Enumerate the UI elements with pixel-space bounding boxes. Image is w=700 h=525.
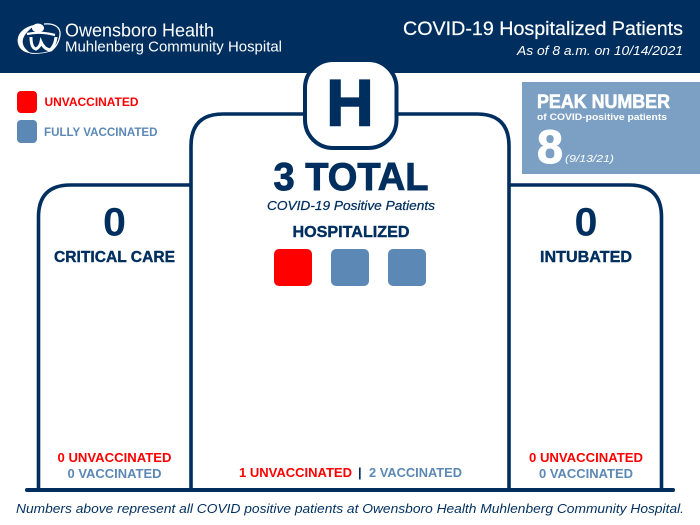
hospitalized breakdown [239, 465, 462, 480]
peak subheading: of COVID-positive patients [537, 112, 667, 123]
patient square: vaccinated 2 [388, 249, 426, 286]
patient square: unvaccinated [274, 249, 312, 286]
icon: hospital H badge: H [326, 65, 374, 139]
intubated count: 0 [574, 200, 598, 244]
panel: critical care [38, 185, 191, 490]
peak heading: PEAK NUMBER [537, 92, 670, 113]
title: COVID-19 Hospitalized Patients [403, 18, 683, 40]
logo subname: Muhlenberg Community Hospital [65, 38, 282, 56]
legend [17, 91, 158, 143]
peak number box [522, 82, 700, 174]
hospitalized vaccinated: 2 VACCINATED [369, 465, 462, 480]
logo name: Owensboro Health [65, 20, 214, 40]
baseline [27, 488, 673, 492]
legend label: unvaccinated: UNVACCINATED [44, 95, 139, 109]
breakdown separator: | [358, 465, 362, 480]
legend swatch: fully vaccinated [17, 120, 37, 143]
intubated heading: INTUBATED [540, 249, 632, 266]
patient square: vaccinated 1 [331, 249, 369, 286]
hospitalized heading: HOSPITALIZED [292, 224, 410, 241]
total count: 3 TOTAL [274, 156, 428, 199]
footnote: Numbers above represent all COVID positive patients at Owensboro Health Muhlenberg Community Hospital. [16, 501, 684, 516]
legend swatch: unvaccinated [17, 91, 37, 113]
date line: As of 8 a.m. on 10/14/2021 [516, 43, 683, 58]
intubated unvaccinated: 0 UNVACCINATED [529, 450, 643, 465]
hospitalized unvaccinated: 1 UNVACCINATED [239, 465, 352, 480]
icon: logo mark [18, 24, 60, 53]
peak date: (9/13/21) [565, 153, 614, 165]
critical care unvaccinated: 0 UNVACCINATED [58, 450, 172, 465]
critical care count: 0 [103, 200, 126, 244]
total subheading: COVID-19 Positive Patients [267, 198, 436, 213]
icon: hospital H badge [305, 60, 396, 148]
panel: intubated [509, 185, 662, 490]
peak value: 8 [537, 120, 563, 173]
hospital logo [18, 20, 282, 56]
legend label: fully vaccinated: FULLY VACCINATED [44, 125, 158, 139]
critical care heading: CRITICAL CARE [54, 249, 175, 266]
panel: hospitalized [191, 114, 509, 490]
critical care vaccinated: 0 VACCINATED [68, 466, 162, 481]
intubated vaccinated: 0 VACCINATED [539, 466, 633, 481]
header band [0, 0, 700, 73]
